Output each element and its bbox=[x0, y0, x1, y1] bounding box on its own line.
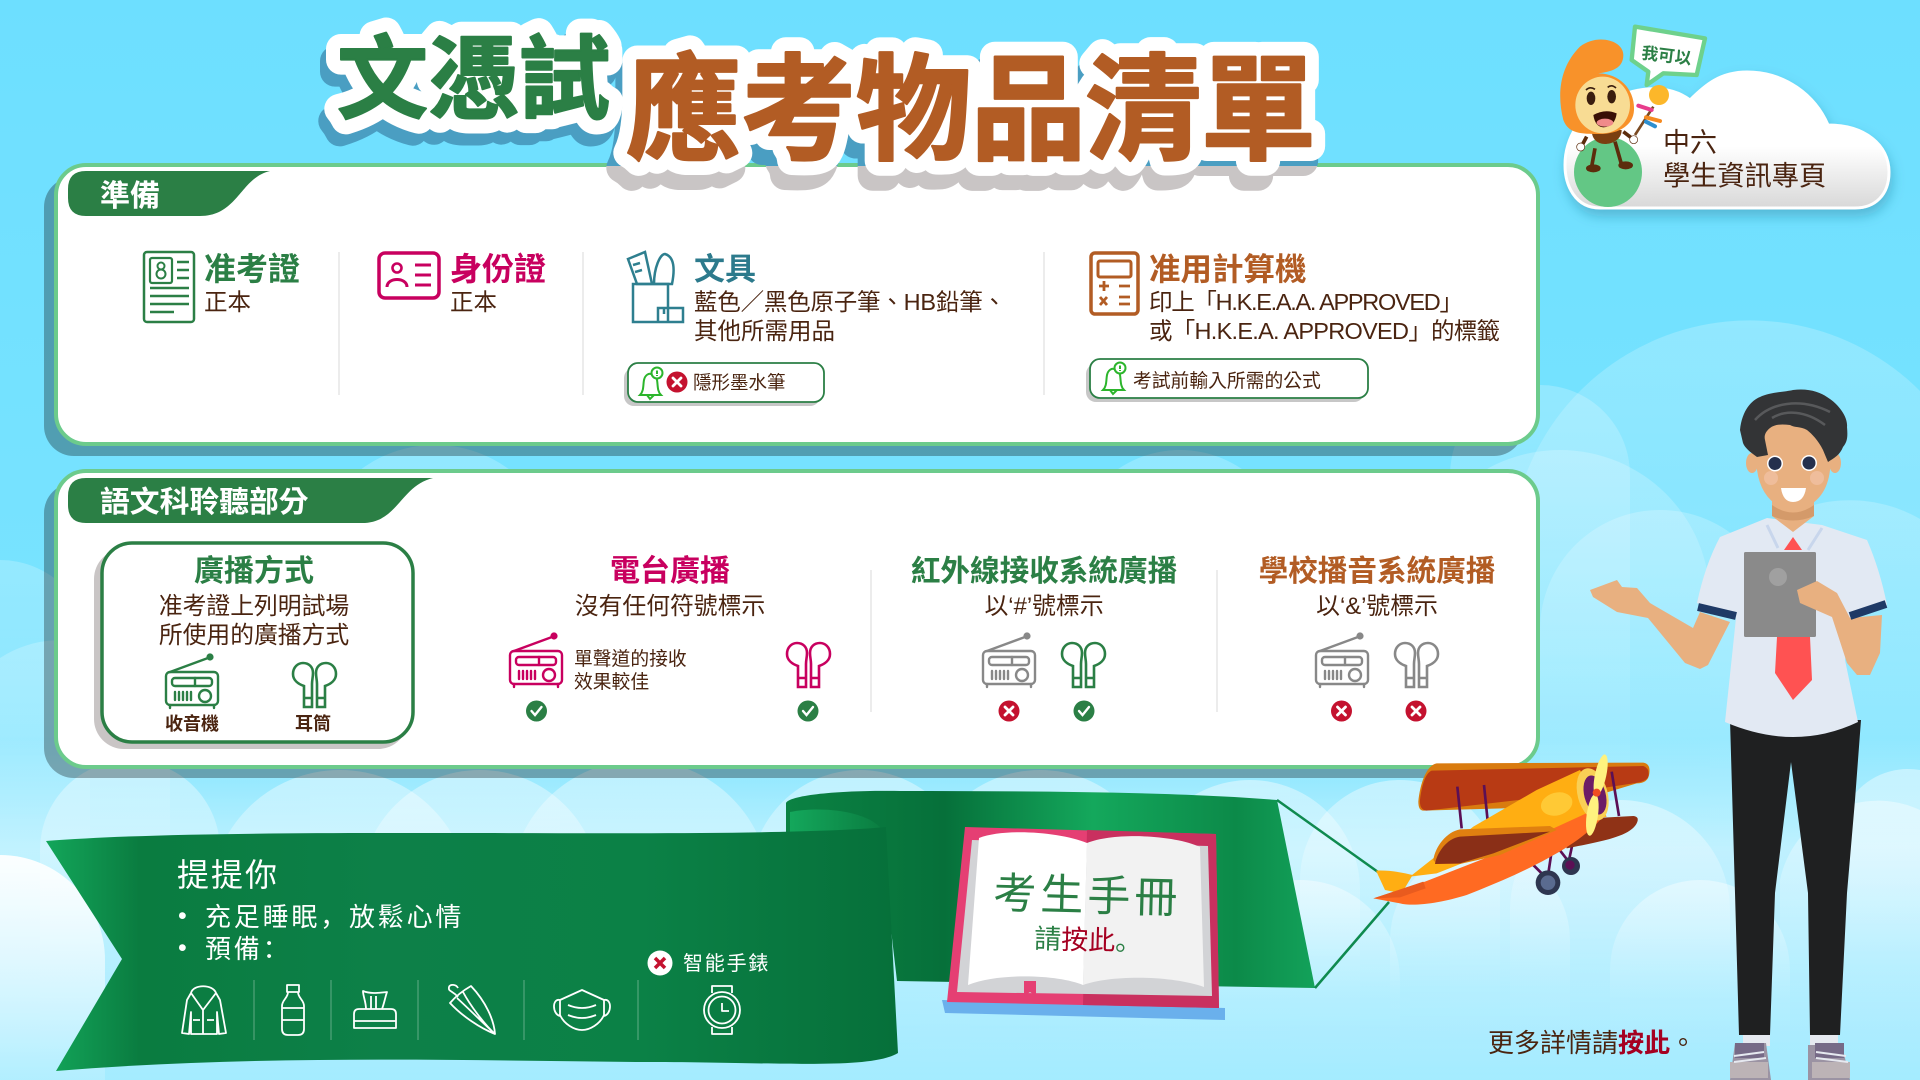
tie bbox=[1775, 537, 1812, 700]
item: 准用計算機: 印上「H.K.E.A.A. APPROVED」 bbox=[1149, 289, 1463, 315]
item icons bbox=[182, 980, 740, 1040]
item: 准用計算機: 或「H.K.E.A. APPROVED」的標籤 bbox=[1149, 318, 1500, 344]
item: 准考證: 准考證 bbox=[204, 251, 300, 287]
icon: radio bbox=[166, 655, 218, 708]
neck and head bbox=[1740, 389, 1847, 532]
reminder text: • bbox=[178, 934, 187, 962]
cloud badge: 中六學生資訊專頁 bbox=[1560, 27, 1889, 208]
item: 准用計算機: 准用計算機 bbox=[1149, 251, 1307, 287]
title: 應考物品清單 bbox=[619, 62, 1309, 190]
icon: watch bbox=[704, 986, 740, 1034]
box: 廣播方式: 收音機 bbox=[165, 713, 219, 734]
column: 學校播音系統廣播: 以‘&’號標示 bbox=[1316, 593, 1438, 620]
note chip: 考試前輸入所需的公式 bbox=[1086, 359, 1368, 402]
item: 文具: 其他所需用品 bbox=[694, 318, 835, 344]
item: 准用計算機 bbox=[1086, 251, 1500, 402]
book: 考生手冊: 考生手冊 bbox=[993, 870, 1182, 923]
note chip: 考試前輸入所需的公式: 考試前輸入所需的公式 bbox=[1133, 370, 1321, 391]
note chip: 隱形墨水筆: 隱形墨水筆 bbox=[693, 372, 786, 393]
icon: bottle bbox=[282, 985, 304, 1035]
ribbon banner bbox=[46, 791, 1389, 1071]
tablet bbox=[1744, 552, 1816, 637]
column: 學校播音系統廣播: 學校播音系統廣播 bbox=[1259, 555, 1495, 588]
shoes bbox=[1730, 1035, 1850, 1080]
reminder text: 充足睡眠，放鬆心情 bbox=[205, 902, 464, 932]
heading tab: 準備: 準備 bbox=[100, 180, 160, 213]
book: 考生手冊 bbox=[942, 827, 1225, 1020]
mascot: 我可以 bbox=[1641, 43, 1693, 68]
heading tab: 語文科聆聽部分 bbox=[68, 478, 433, 523]
cloud badge: 中六學生資訊專頁: 中六 bbox=[1663, 128, 1717, 158]
column: 紅外線接收系統廣播: 以‘#’號標示 bbox=[984, 593, 1104, 620]
icon: mask bbox=[554, 990, 610, 1030]
box: 廣播方式: 所使用的廣播方式 bbox=[159, 622, 349, 649]
title bbox=[331, 30, 1316, 190]
panel: 準備 bbox=[44, 165, 1538, 456]
note chip: 隱形墨水筆 bbox=[624, 363, 824, 406]
title: 應考物品清單 bbox=[619, 62, 1309, 190]
more info link: 更多詳情請按此。 bbox=[1488, 1028, 1696, 1058]
icon: jacket bbox=[182, 986, 226, 1034]
man character bbox=[1590, 389, 1887, 1080]
column: 電台廣播: 沒有任何符號標示 bbox=[575, 593, 765, 620]
title: 文憑試 bbox=[331, 42, 604, 143]
column: 電台廣播 bbox=[510, 554, 830, 722]
ribbon front bbox=[46, 827, 898, 1071]
title: 應考物品清單 bbox=[626, 47, 1316, 175]
box: 廣播方式: 准考證上列明試場 bbox=[159, 593, 349, 620]
item: 身份證: 身份證 bbox=[450, 251, 546, 287]
heading tab: 準備 bbox=[68, 171, 270, 216]
item: 准考證: 正本 bbox=[204, 289, 251, 315]
title: 文憑試 bbox=[337, 30, 610, 131]
column: 紅外線接收系統廣播 bbox=[911, 555, 1177, 722]
item: 身份證 bbox=[379, 251, 546, 315]
right arm and hand bbox=[1797, 581, 1882, 675]
reminder text: 提提你 bbox=[177, 857, 279, 893]
box: 廣播方式 bbox=[94, 543, 413, 749]
item: 身份證: 正本 bbox=[450, 289, 497, 315]
box: 廣播方式: 廣播方式 bbox=[194, 555, 314, 588]
column: 電台廣播: 效果較佳 bbox=[574, 671, 649, 692]
icon: earbuds bbox=[293, 663, 336, 707]
reminder text bbox=[177, 857, 770, 976]
icon: tissue box bbox=[354, 991, 396, 1028]
ribbon back bbox=[786, 791, 1315, 988]
reminder text: 預備： bbox=[205, 934, 291, 964]
column: 電台廣播: 單聲道的接收 bbox=[574, 648, 687, 669]
mascot bbox=[1560, 27, 1705, 172]
shirt bbox=[1697, 518, 1887, 737]
title: 應考物品清單 bbox=[626, 47, 1316, 175]
left arm and hand bbox=[1590, 580, 1730, 669]
panel: 語文科聆聽部分 bbox=[44, 471, 1538, 778]
reminder text: 智能手錶 bbox=[683, 952, 770, 975]
heading tab: 語文科聆聽部分: 語文科聆聽部分 bbox=[100, 486, 309, 519]
reminder text: • bbox=[178, 902, 187, 930]
box: 廣播方式: 耳筒 bbox=[295, 713, 331, 734]
column: 學校播音系統廣播 bbox=[1259, 555, 1495, 722]
airplane bbox=[1373, 753, 1650, 905]
column: 紅外線接收系統廣播: 紅外線接收系統廣播 bbox=[911, 555, 1177, 588]
item: 文具: 藍色／黑色原子筆、HB鉛筆、 bbox=[694, 289, 1006, 315]
column: 電台廣播: 電台廣播 bbox=[610, 554, 730, 588]
item: 文具: 文具 bbox=[694, 252, 756, 287]
cloud badge: 中六學生資訊專頁: 學生資訊專頁 bbox=[1663, 160, 1826, 191]
legs bbox=[1730, 720, 1861, 1035]
item: 准考證 bbox=[144, 251, 300, 322]
icon: umbrella bbox=[449, 985, 495, 1034]
book: 考生手冊: 請按此。 bbox=[1034, 924, 1143, 957]
item: 文具 bbox=[624, 252, 1006, 406]
title: 文憑試 bbox=[337, 30, 610, 131]
